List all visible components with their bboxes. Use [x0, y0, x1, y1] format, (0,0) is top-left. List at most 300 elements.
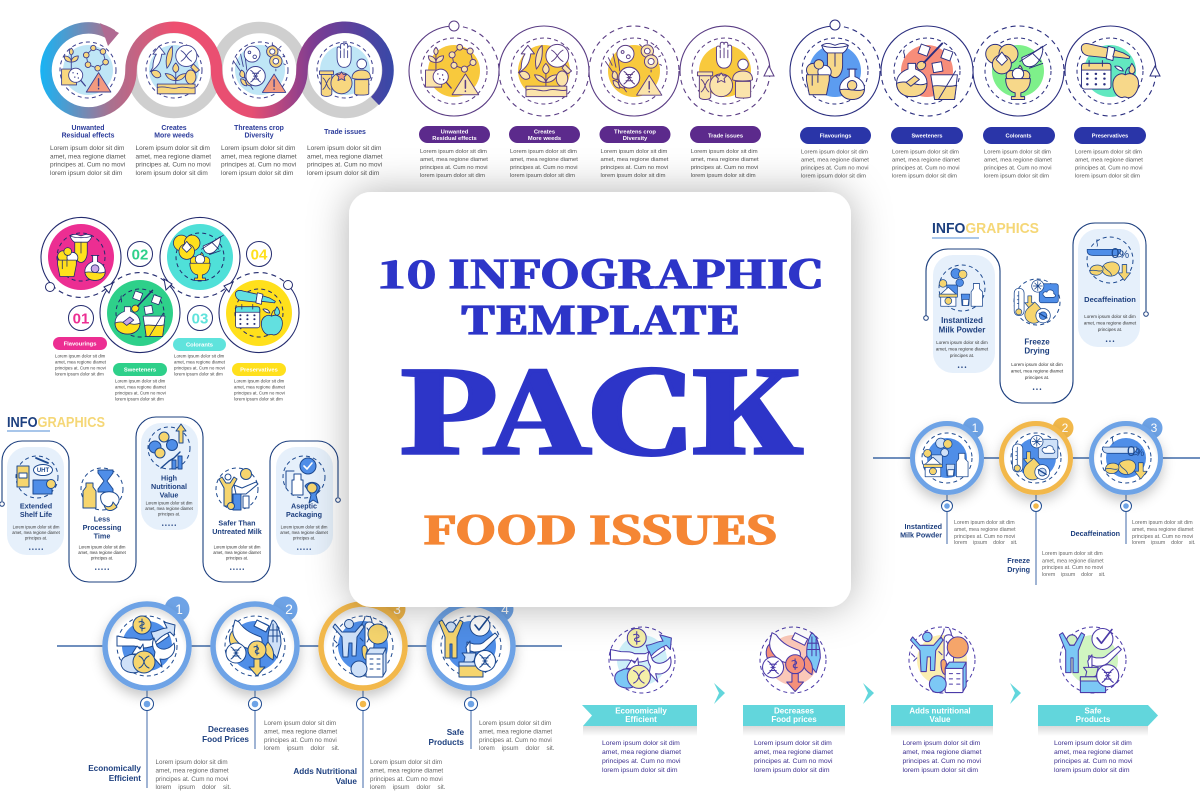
step 1: instantized milk powder: [900, 418, 1018, 546]
text block: principes at. Cum no movi: [954, 534, 1015, 540]
text block: amet, mea regione diamet: [420, 157, 488, 163]
text block: amet, mea regione diamet: [280, 530, 329, 535]
icon: sweeteners: [894, 38, 960, 104]
icon: person, hand and bottle: [216, 468, 258, 510]
text block: lorem ipsum dolor sit dim: [600, 173, 666, 179]
title line: 10 infographic: 10 INFOGRAPHIC: [377, 245, 822, 299]
text block: lorem ipsum dolor sit dim: [115, 396, 164, 402]
number badge 3: 3: [1151, 421, 1158, 435]
text block: lorem ipsum dolor sit dim: [602, 767, 678, 774]
panel: blue circles additives infographic: [790, 20, 1160, 180]
icon: threatens crop diversity: [601, 38, 667, 104]
item: threatens crop diversity: [221, 42, 297, 177]
text block: amet, mea regione diamet: [145, 506, 194, 511]
text block: lorem ipsum dolor sit dim: [174, 372, 223, 376]
panel: five milk processing cards: [0, 415, 340, 582]
icon: creates more weeds: [511, 38, 577, 104]
gradient wave ribbon: [46, 27, 388, 113]
number badge 2: [1052, 418, 1074, 438]
heading: Trade issues: [324, 129, 366, 136]
text block: amet, mea regione diamet: [602, 749, 681, 756]
icon: sweeteners: [107, 280, 173, 346]
heading: Packaging: [286, 510, 322, 519]
icon: nutrition chart: [148, 424, 190, 469]
number badge 2: [272, 596, 298, 622]
ribbon label: [1038, 705, 1158, 726]
ring icon: [912, 424, 982, 492]
text block: amet, mea regione diamet: [691, 157, 759, 163]
text block: principes at. Cum no movi: [420, 165, 488, 171]
card: decaffeination: [1084, 237, 1137, 345]
step: decreases food prices: [743, 627, 845, 774]
text block: principes at. Cum no movi: [234, 390, 285, 396]
text block: amet, mea regione diamet: [754, 749, 833, 756]
item: creates more weeds: [509, 38, 580, 179]
text block: principes at. Cum no movi: [370, 776, 443, 783]
more dots: • • • • •: [230, 567, 244, 573]
icon: creates more weeds: [146, 42, 202, 98]
number badge 1: 1: [972, 421, 979, 435]
heading: Value: [336, 777, 357, 786]
heading: Less: [94, 514, 110, 524]
text block: principes at. Cum no movi: [600, 165, 668, 171]
text block: Lorem ipsum dolor sit dim: [221, 145, 295, 152]
item: 04 preservatives: [226, 242, 292, 402]
ring icon: [1002, 424, 1070, 492]
text block: amet, mea regione diamet: [1075, 158, 1143, 164]
text block: lorem ipsum dolor sit dim: [1075, 174, 1140, 180]
icon: freeze drying: [1014, 279, 1060, 325]
number 04: 04: [251, 246, 268, 264]
text block: principes at. Cum no movi: [174, 366, 225, 370]
text block: principes at. Cum no movi: [602, 758, 681, 765]
more dots: • • • • •: [297, 547, 311, 553]
icon: colorants: [985, 38, 1051, 104]
label pill: More weeds: [528, 136, 561, 142]
heading: Decreases: [208, 725, 249, 734]
text block: lorem ipsum dolor sit dim: [510, 173, 575, 179]
ribbon label: [582, 705, 697, 726]
heading: Instantized: [904, 522, 942, 531]
text block: principes at. Cum no movi: [307, 162, 382, 168]
number 01: 01: [73, 310, 89, 328]
text block: Lorem ipsum dolor sit dim: [79, 544, 126, 550]
ring icon: 0%: [1127, 443, 1144, 460]
text block: principes at.: [1025, 375, 1049, 380]
card background: [349, 192, 851, 607]
number badge 4: 4: [501, 601, 509, 617]
heading: Economically: [88, 764, 141, 773]
text block: Lorem ipsum dolor sit dim: [902, 740, 981, 747]
card: safer than untreated milk: [212, 468, 262, 573]
text block: lorem ipsum dolor sit dim: [892, 174, 957, 180]
ring icon: [429, 604, 513, 688]
item: trade issues: [690, 38, 761, 179]
step 3: adds nutritional value: [293, 596, 446, 791]
text block: principes at. Cum no movi: [156, 776, 228, 783]
text block: principes at.: [1098, 327, 1122, 332]
text block: principes at.: [91, 556, 113, 560]
text block: lorem ipsum dolor sit.: [1042, 572, 1106, 578]
text block: Lorem ipsum dolor sit dim: [234, 378, 285, 384]
icon: trade issues: [317, 42, 373, 98]
ribbon shadows: [583, 726, 1148, 736]
timeline axis: [57, 645, 562, 647]
text block: Lorem ipsum dolor sit dim: [892, 150, 959, 156]
icon: hourglass, bottle and cow: [81, 468, 123, 511]
more dots: • • • • •: [162, 523, 176, 529]
text block: lorem ipsum dolor sit dim: [55, 372, 104, 376]
label pill: [113, 363, 167, 376]
panel: central title card: [349, 192, 851, 607]
label pill: [891, 127, 963, 144]
frame end nodes: [0, 498, 340, 506]
item: sweeteners: [891, 38, 963, 180]
text block: amet, mea regione diamet: [12, 530, 61, 535]
panel: wave rings infographic: [46, 23, 388, 177]
step: adds nutritional value: [891, 627, 993, 774]
text block: principes at. Cum no movi: [902, 758, 982, 765]
grey ring segments: [132, 28, 388, 112]
text block: Lorem ipsum dolor sit dim: [214, 544, 261, 550]
ring icon: [321, 604, 405, 688]
label pill: Trade issues: [708, 134, 743, 140]
text block: Lorem ipsum dolor sit dim: [115, 378, 166, 384]
label pill: [173, 338, 226, 351]
text block: amet, mea regione diamet: [50, 154, 126, 160]
label pill: [800, 127, 871, 144]
text block: amet, mea regione diamet: [902, 749, 982, 756]
circle connectors: [41, 217, 299, 353]
card backgrounds: [7, 423, 333, 555]
icon: flavourings: [802, 38, 868, 104]
icon: decreases food prices: [760, 627, 826, 693]
text block: amet, mea regione diamet: [1054, 749, 1133, 756]
heading: Food Prices: [202, 735, 249, 744]
connecting frame line: [926, 223, 1146, 403]
card: freeze drying: [1011, 279, 1064, 393]
label pill: [1074, 127, 1146, 144]
heading underline: [7, 430, 50, 432]
text block: amet, mea regione diamet: [892, 158, 960, 164]
number badge 4: [488, 596, 514, 622]
text block: Lorem ipsum dolor sit dim: [1042, 551, 1103, 557]
text block: Lorem ipsum dolor sit dim: [146, 500, 193, 506]
text block: amet, mea regione diamet: [234, 384, 286, 390]
icon: unwanted residual effects: [60, 42, 116, 98]
panel: three step timeline: [873, 418, 1200, 585]
text block: Lorem ipsum dolor sit dim: [691, 149, 758, 155]
text block: amet, mea regione diamet: [78, 550, 127, 555]
icon: adds nutritional value: [909, 627, 975, 693]
text block: principes at. Cum no movi: [50, 162, 125, 168]
item: threatens crop diversity: [600, 38, 670, 179]
heading: infographics: INFOGRAPHICS: [7, 415, 105, 431]
text block: amet, mea regione diamet: [954, 527, 1016, 533]
text block: amet, mea regione diamet: [221, 154, 297, 160]
step: safe products: [1038, 627, 1158, 774]
node: [356, 698, 370, 710]
node: [942, 500, 952, 512]
text block: Lorem ipsum dolor sit dim: [370, 759, 442, 766]
text block: principes at. Cum no movi: [754, 758, 833, 765]
more dots: • • • • •: [95, 567, 109, 573]
heading: Creates: [161, 125, 187, 132]
item: unwanted residual effects: [50, 42, 126, 177]
item: preservatives: [1074, 38, 1146, 180]
text block: lorem ipsum dolor sit dim: [801, 174, 866, 180]
text block: amet, mea regione diamet: [370, 768, 443, 774]
text block: Lorem ipsum dolor sit dim: [13, 524, 60, 530]
outer circle connectors: [409, 21, 774, 116]
icon: trade issues: [692, 38, 758, 104]
heading: Decaffeination: [1084, 295, 1136, 304]
card backgrounds: [933, 229, 1140, 373]
heading: Threatens crop: [234, 125, 284, 132]
frame end nodes: [924, 312, 1148, 320]
text block: Lorem ipsum dolor sit dim: [984, 150, 1051, 156]
text block: Lorem ipsum dolor sit dim: [136, 145, 210, 152]
text block: lorem ipsum dolor sit dim: [691, 173, 756, 179]
heading: Drying: [1024, 346, 1050, 356]
text block: Lorem ipsum dolor sit dim: [936, 340, 988, 345]
text block: principes at. Cum no movi: [1132, 534, 1193, 540]
connecting frame line: [2, 417, 338, 582]
title line: template: TEMPLATE: [461, 291, 739, 345]
panel: four step timeline: [57, 596, 562, 791]
panel: numbered coloured circles: [41, 217, 299, 402]
text block: amet, mea regione diamet: [936, 346, 989, 352]
ribbon label: Value: [930, 715, 951, 724]
text block: amet, mea regione diamet: [984, 158, 1052, 164]
text block: lorem ipsum dolor sit dim: [984, 174, 1049, 180]
text block: lorem ipsum dolor sit dim: [136, 170, 208, 177]
heading underline: [932, 237, 979, 239]
label pill: Preservatives: [1092, 134, 1128, 140]
ribbon label: [891, 705, 993, 726]
text block: lorem ipsum dolor sit dim: [50, 170, 122, 177]
number 03: 03: [192, 310, 208, 328]
label pill: Creates: [534, 130, 555, 136]
text block: lorem ipsum dolor sit dim: [234, 396, 283, 402]
item: 01 flavourings: [48, 224, 114, 376]
node: [140, 698, 154, 710]
title line: pack: PACK: [398, 327, 803, 485]
number badge 3: 3: [393, 601, 401, 617]
label pill: [53, 337, 107, 350]
label pill: [690, 126, 761, 143]
text block: Lorem ipsum dolor sit dim: [55, 354, 106, 358]
item: 02 sweeteners: [107, 242, 173, 402]
icon: economically efficient: [609, 627, 675, 693]
card: less processing time: [78, 468, 127, 573]
step drop lines: [947, 495, 1126, 585]
panel: three coffee and milk cards: [924, 220, 1148, 403]
heading: Safe: [447, 728, 464, 737]
text block: Lorem ipsum dolor sit dim: [1054, 740, 1132, 747]
more dots: • • •: [958, 365, 966, 371]
heading: High: [161, 474, 177, 482]
icon: preservatives: [1077, 38, 1143, 104]
ribbon label: Adds nutritional: [909, 706, 971, 716]
text block: lorem ipsum dolor sit.: [479, 745, 555, 752]
text block: lorem ipsum dolor sit.: [1132, 540, 1196, 546]
node: [1120, 500, 1132, 512]
text block: amet, mea regione diamet: [213, 550, 262, 555]
item: creates more weeds: [136, 42, 211, 177]
text block: principes at.: [25, 536, 47, 540]
text block: principes at. Cum no movi: [984, 166, 1052, 172]
ribbon label: Products: [1076, 715, 1111, 724]
text block: principes at. Cum no movi: [221, 162, 296, 168]
heading: Milk Powder: [939, 326, 985, 334]
text block: Lorem ipsum dolor sit dim: [602, 740, 680, 747]
step 2: decreases food prices: [202, 596, 340, 752]
ring icon: [105, 604, 189, 688]
heading: Residual effects: [62, 132, 115, 140]
label pill: Flavourings: [820, 134, 851, 140]
icon: colorants: [167, 224, 233, 290]
timeline axis: [873, 457, 1200, 459]
text block: principes at. Cum no movi: [892, 166, 960, 172]
text block: Lorem ipsum dolor sit dim: [281, 524, 328, 530]
step 2: freeze drying: [1002, 418, 1106, 578]
chevron arrows: [714, 683, 1021, 704]
ribbon label: Food prices: [771, 715, 817, 724]
text block: Lorem ipsum dolor sit dim: [1075, 150, 1142, 156]
text block: principes at.: [226, 556, 248, 560]
text block: principes at.: [950, 353, 974, 358]
heading: Aseptic: [291, 502, 317, 510]
heading: Nutritional: [151, 482, 187, 491]
text block: principes at.: [293, 536, 315, 540]
icon: unwanted residual effects: [421, 38, 487, 104]
icon: instantized milk powder: [939, 265, 985, 311]
label pill: Sweeteners: [124, 368, 156, 374]
number 01: [68, 306, 94, 330]
icon: threatens crop diversity: [232, 42, 288, 98]
label pill: Preservatives: [240, 368, 278, 374]
icon: preservatives: [226, 280, 292, 346]
text block: Lorem ipsum dolor sit dim: [420, 149, 487, 155]
text block: principes at. Cum no movi: [1042, 565, 1103, 571]
item: colorants: [983, 38, 1055, 180]
ribbon label: Efficient: [625, 715, 657, 724]
label pill: Threatens crop: [614, 130, 656, 136]
number 02: [128, 242, 152, 266]
text block: lorem ipsum dolor sit.: [370, 784, 446, 791]
text block: amet, mea regione diamet: [1011, 368, 1064, 374]
label pill: Colorants: [186, 342, 213, 348]
heading: Shelf Life: [20, 510, 52, 519]
ribbon label: Safe: [1085, 706, 1102, 716]
label pill: Diversity: [623, 136, 648, 142]
icon: badge and bottle: [283, 456, 325, 503]
outer circle connectors: [790, 20, 1160, 116]
heading: Untreated Milk: [212, 527, 262, 536]
more dots: • • •: [1033, 387, 1041, 393]
subtitle: food issues: FOOD ISSUES: [423, 501, 777, 555]
text block: Lorem ipsum dolor sit dim: [50, 145, 124, 152]
text block: lorem ipsum dolor sit dim: [221, 170, 293, 177]
label pill: Unwanted: [441, 130, 469, 136]
text block: Lorem ipsum dolor sit dim: [174, 354, 225, 358]
ribbon label: Economically: [615, 706, 667, 716]
heading: Time: [94, 532, 110, 540]
text block: principes at. Cum no movi: [115, 390, 166, 396]
heading: Drying: [1007, 565, 1030, 574]
label pill: [983, 127, 1055, 144]
heading: Efficient: [109, 774, 141, 783]
text block: amet, mea regione diamet: [55, 360, 107, 364]
heading: Safer Than: [218, 518, 256, 528]
heading: infographics: INFOGRAPHICS: [932, 220, 1039, 237]
heading: Milk Powder: [900, 530, 942, 540]
step: economically efficient: [582, 627, 697, 774]
text block: Lorem ipsum dolor sit dim: [156, 759, 228, 766]
text block: lorem ipsum dolor sit.: [954, 540, 1018, 546]
node: [464, 698, 478, 710]
step drop lines: [147, 690, 471, 788]
text block: Lorem ipsum dolor sit dim: [510, 149, 577, 155]
icon: flavourings: [48, 224, 114, 290]
text block: lorem ipsum dolor sit dim: [1054, 767, 1130, 774]
number 04: [246, 242, 272, 266]
heading: Freeze: [1007, 556, 1030, 565]
heading: Freeze: [1024, 338, 1050, 346]
number badge 1: [164, 596, 190, 622]
more dots: • • •: [1106, 339, 1114, 345]
text block: amet, mea regione diamet: [510, 157, 578, 163]
text block: lorem ipsum dolor sit dim: [902, 767, 978, 774]
text block: lorem ipsum dolor sit dim: [754, 767, 830, 774]
number badge 3: [380, 596, 406, 622]
text block: principes at.: [158, 512, 180, 516]
ring icon: [213, 604, 297, 688]
step 3: decaffeination: [1070, 418, 1196, 546]
text block: Lorem ipsum dolor sit dim: [479, 720, 551, 727]
text block: principes at. Cum no movi: [510, 165, 578, 171]
text block: Lorem ipsum dolor sit dim: [954, 520, 1015, 526]
text block: principes at. Cum no movi: [55, 366, 106, 370]
heading: Value: [160, 490, 178, 500]
number 03: [188, 306, 212, 330]
number badge 1: 1: [175, 601, 183, 617]
text block: Lorem ipsum dolor sit dim: [600, 149, 668, 155]
text block: principes at. Cum no movi: [1054, 758, 1133, 765]
label pill: [509, 126, 580, 143]
text block: amet, mea regione diamet: [174, 360, 226, 364]
text block: lorem ipsum dolor sit.: [156, 784, 231, 791]
node: [248, 698, 262, 710]
step 1: economically efficient: [88, 596, 231, 791]
heading: Processing: [83, 523, 121, 532]
step 4: safe products: [428, 596, 555, 752]
icon: decaffeinated coffee: 0%: [1111, 245, 1129, 262]
text block: amet, mea regione diamet: [1132, 527, 1194, 533]
text block: lorem ipsum dolor sit dim: [307, 170, 379, 177]
text block: lorem ipsum dolor sit dim: [420, 173, 485, 179]
card: instantized milk powder: [936, 265, 989, 371]
label pill: Colorants: [1005, 134, 1032, 140]
more dots: • • • • •: [29, 547, 43, 553]
icon: UHT carton: UHT: [37, 468, 49, 474]
item: flavourings: [800, 38, 871, 180]
card: extended shelf life: [12, 456, 61, 553]
heading: Extended: [20, 502, 52, 510]
text block: Lorem ipsum dolor sit dim: [264, 720, 336, 727]
label pill: Flavourings: [64, 342, 96, 348]
